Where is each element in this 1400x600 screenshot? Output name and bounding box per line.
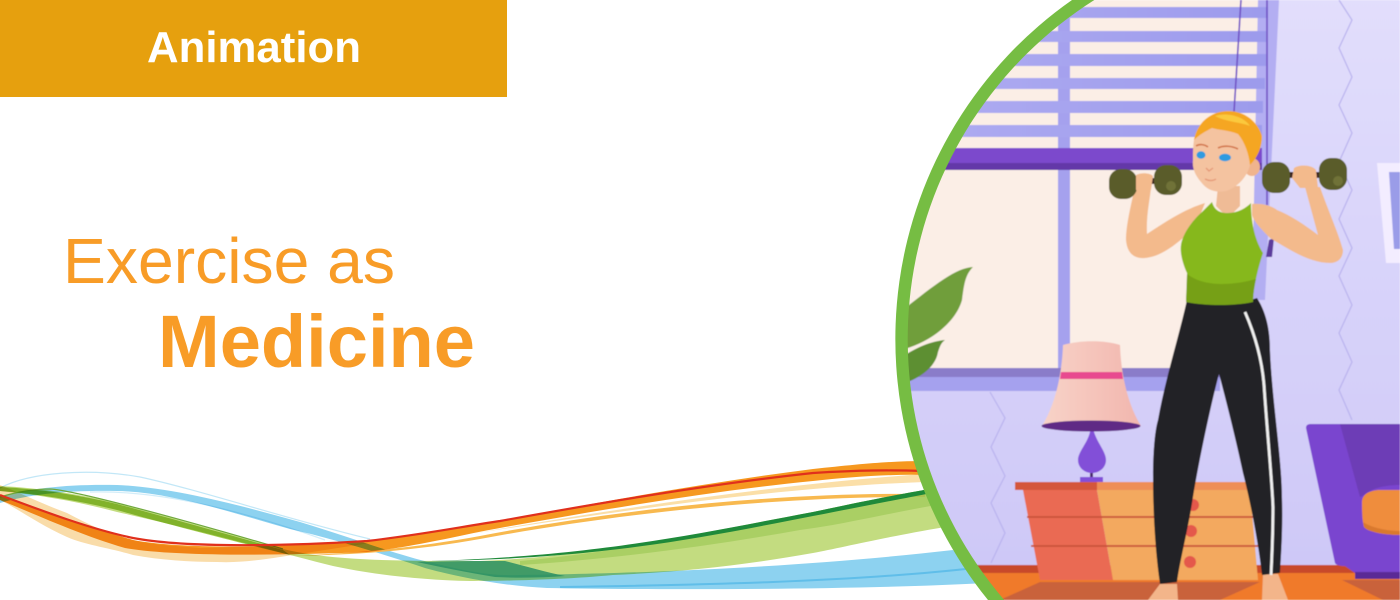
ribbon: green [0,486,945,581]
table lamp [1042,341,1141,482]
window sill [890,368,1220,391]
plant [908,266,974,382]
feet [1148,574,1288,600]
window side frame [1252,0,1279,300]
face [1193,125,1250,192]
banner label: Animation [147,23,361,72]
window [890,0,1279,391]
eyes [1196,151,1231,161]
woman [1109,111,1347,600]
room wall [890,0,1400,600]
ribbon: thin orange line [290,494,925,556]
dresser drawers [1027,517,1258,546]
hair [1194,111,1262,165]
pants side stripe [1245,312,1273,575]
dumbbell left [1109,165,1182,199]
armchair [1306,424,1400,579]
blind cord [1234,0,1267,205]
ribbon: pale orange edge [470,474,925,534]
ribbon: blue [0,485,985,589]
illustration: woman lifting dumbbells in a living room [890,0,1400,600]
mouth and nose [1205,168,1216,180]
neck [1216,186,1240,214]
ear [1244,158,1260,176]
wall picture [1377,163,1400,263]
ribbon: orange and red [0,461,925,555]
coloured flowing ribbons [0,461,985,589]
ribbon: dark green edge [430,489,932,561]
dresser left face [1023,490,1113,580]
dresser right face [1097,490,1258,580]
blind bottom rail [890,148,1262,170]
dresser [1015,482,1280,580]
green circular border [895,0,1094,600]
title [63,225,475,383]
floor [977,564,1400,600]
tank top [1181,202,1263,305]
blind slats [962,6,1266,138]
ribbon: pale orange [0,485,370,562]
lamp shade [1042,341,1141,426]
dresser knobs [1184,499,1199,568]
window panes [890,0,1258,370]
armchair cushion [1362,490,1400,535]
arm right [1252,187,1343,263]
wall pattern [990,0,1352,563]
head [1193,111,1262,192]
dresser top [1015,482,1097,490]
lamp base [1078,430,1106,474]
eyebrows [1196,145,1238,149]
window mullion [1058,0,1070,370]
dumbbell right [1262,158,1347,193]
title line 2: Medicine [158,300,475,383]
ribbon: dark teal crossing [417,561,565,578]
ribbon: thin blue lines [0,472,370,540]
header banner [0,0,507,97]
pants [1153,298,1282,584]
title line 1: Exercise as [63,225,395,297]
arm left [1126,187,1205,258]
